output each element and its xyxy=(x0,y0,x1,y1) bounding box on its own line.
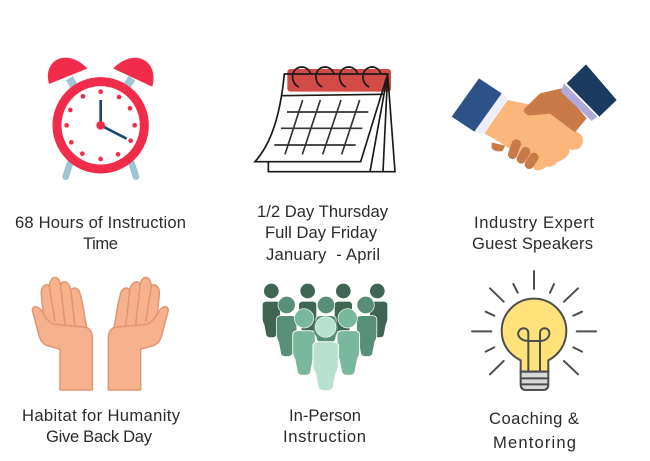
icon: alarm clock xyxy=(48,58,153,177)
label: schedule: January - April xyxy=(266,245,380,264)
icon: light bulb xyxy=(472,271,596,390)
label: give back day xyxy=(22,406,181,446)
label: in-person instruction: Instruction xyxy=(283,427,366,446)
label: coaching and mentoring: Coaching & xyxy=(489,409,579,428)
label: instruction time: 68 Hours of Instruction xyxy=(15,213,186,232)
label: instruction time: Time xyxy=(83,234,118,253)
icon: handshake xyxy=(452,64,617,170)
label: guest speakers: Industry Expert xyxy=(474,213,594,232)
label: instruction time xyxy=(15,213,186,253)
right hand xyxy=(108,277,168,390)
label: coaching and mentoring: Mentoring xyxy=(493,433,576,452)
label: schedule xyxy=(257,202,389,264)
label: coaching and mentoring xyxy=(489,409,579,452)
icon: open hands xyxy=(32,277,168,390)
label: guest speakers: Guest Speakers xyxy=(472,234,593,253)
left hand xyxy=(32,277,92,390)
label: guest speakers xyxy=(472,213,594,253)
label: give back day: Give Back Day xyxy=(46,427,153,446)
label: schedule: Full Day Friday xyxy=(265,223,378,242)
label: in-person instruction xyxy=(283,406,366,446)
icon: calendar xyxy=(255,67,395,172)
label: schedule: 1/2 Day Thursday xyxy=(257,202,389,221)
icon: group of people xyxy=(263,284,387,391)
label: in-person instruction: In-Person xyxy=(289,406,361,425)
label: give back day: Habitat for Humanity xyxy=(22,406,181,425)
